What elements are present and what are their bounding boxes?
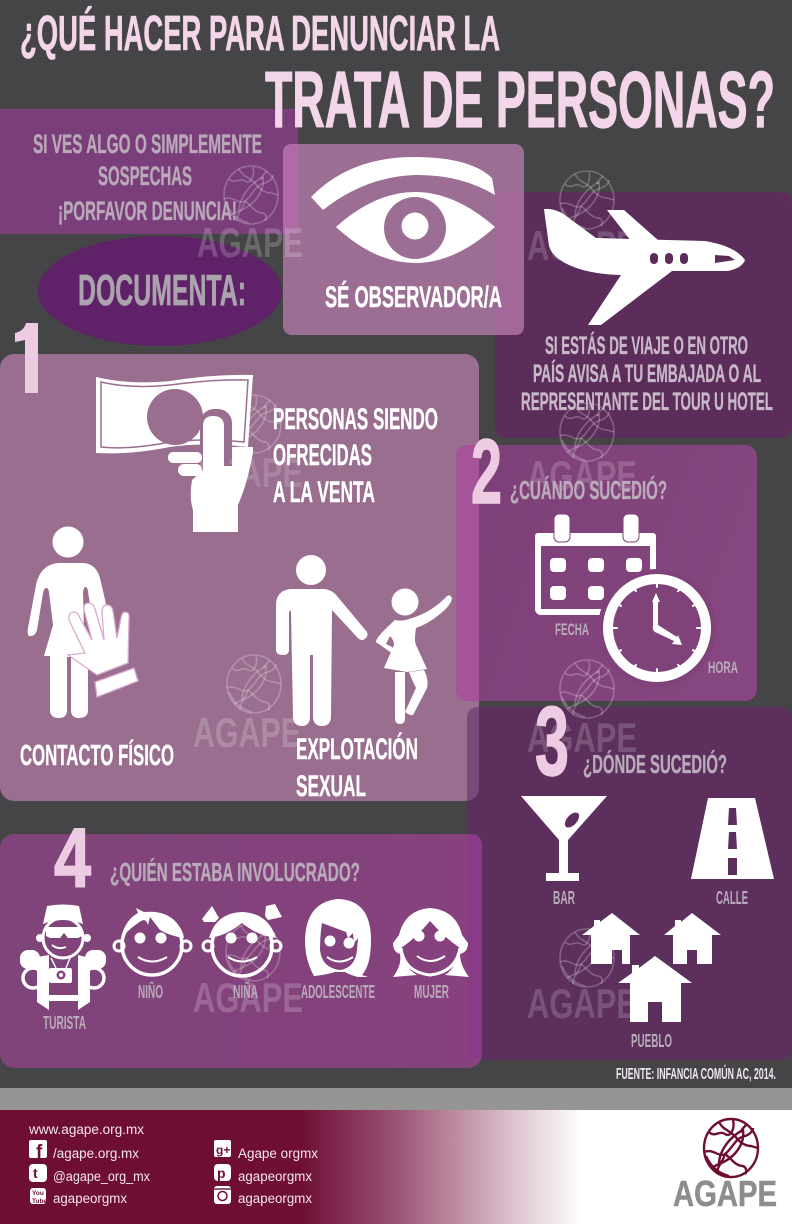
footer: facebook: /agape.org.mx <box>53 1146 139 1161</box>
icon: hand with money <box>96 375 253 532</box>
icon: clock <box>598 569 716 687</box>
number 1 <box>15 323 38 393</box>
icon: plane <box>544 209 745 325</box>
text: personas siendo ofrecidas: PERSONAS SIENDO <box>273 403 438 436</box>
footer: facebook <box>29 1140 139 1163</box>
icon: mujer <box>393 908 469 977</box>
watermark: agape 1 <box>197 166 303 266</box>
footer: instagram <box>214 1186 312 1206</box>
footer band <box>0 1110 792 1224</box>
footer: google plus: g+ <box>216 1143 230 1157</box>
logo: agape <box>673 1119 777 1214</box>
watermark: agape 3: AGAPE <box>527 452 637 499</box>
label: hora: HORA <box>708 658 738 677</box>
icon: woman with hand <box>28 526 138 718</box>
text: si ves algo: SOSPECHAS <box>98 161 192 191</box>
watermark: agape 2 <box>527 171 637 269</box>
watermark: agape 1: AGAPE <box>197 219 303 266</box>
label: mujer: MUJER <box>414 982 449 1002</box>
panel: paso 3 donde <box>467 707 792 1060</box>
footer: website: www.agape.org.mx <box>28 1122 144 1137</box>
label: se observador: SÉ OBSERVADOR/A <box>325 280 502 314</box>
panel: documenta oval <box>38 236 282 346</box>
footer: youtube: You <box>32 1190 44 1197</box>
footer: youtube: Tube <box>32 1198 47 1205</box>
grey band <box>0 1088 792 1110</box>
icon: calendar <box>535 514 656 612</box>
watermark: agape 7 <box>527 929 637 1027</box>
text: si ves algo: ¡PORFAVOR DENUNCIA! <box>58 196 237 226</box>
panel: se observador <box>283 144 524 335</box>
text: personas siendo ofrecidas <box>273 403 438 509</box>
panel: paso 2 cuando <box>456 445 757 701</box>
label: turista: TURISTA <box>43 1013 86 1033</box>
text: viaje <box>521 331 773 416</box>
panel: si ves algo <box>0 109 298 234</box>
icon: eye <box>311 157 495 263</box>
overlap: observador sobre viaje <box>495 192 524 335</box>
footer: twitter <box>29 1164 150 1184</box>
watermark: agape 3 <box>527 403 637 499</box>
icon: martini <box>521 796 607 881</box>
watermark: agape 8 <box>193 923 303 1021</box>
watermark: agape 7: AGAPE <box>527 980 637 1027</box>
overlap: paso 3 sobre paso 1 <box>467 707 479 801</box>
label: contacto fisico: CONTACTO FÍSICO <box>20 738 174 772</box>
icon: houses <box>582 913 721 1022</box>
number 4: 4 <box>54 811 91 905</box>
icon: adolescente <box>305 899 371 977</box>
footer: instagram: agapeorgmx <box>238 1191 312 1206</box>
watermark: agape 4: AGAPE <box>193 449 303 496</box>
label: calle: CALLE <box>716 888 748 908</box>
number 3: 3 <box>535 686 569 796</box>
footer: google plus <box>214 1140 318 1161</box>
label: explotacion sexual: EXPLOTACIÓN <box>296 732 418 766</box>
watermark: agape 8: AGAPE <box>193 974 303 1021</box>
icon: road <box>691 798 774 879</box>
heading: cuando sucedio: ¿CUÁNDO SUCEDIÓ? <box>510 475 667 505</box>
label: nino: NIÑO <box>138 981 163 1002</box>
footer: pinterest: agapeorgmx <box>238 1169 312 1184</box>
footer: pinterest: p <box>217 1165 226 1181</box>
overlap: paso 4 sobre paso 3 <box>467 834 482 1060</box>
footer: pinterest <box>214 1164 312 1184</box>
label: explotacion sexual <box>296 732 418 803</box>
icon: nino <box>114 908 191 975</box>
text: personas siendo ofrecidas: A LA VENTA <box>273 476 375 509</box>
watermark: agape 2: AGAPE <box>527 222 637 269</box>
footer: youtube: agapeorgmx <box>53 1191 127 1206</box>
panel: paso 1 documenta evidencia <box>0 354 479 801</box>
overlap: paso 2 sobre paso 1 <box>456 445 479 701</box>
panel: paso 4 quien <box>0 834 482 1068</box>
watermark: agape 5 <box>193 655 301 756</box>
footer: twitter: @agape_org_mx <box>53 1169 150 1184</box>
overlap: observador sobre texto <box>283 144 298 234</box>
icon: man and girl <box>276 555 452 726</box>
panel: viaje <box>495 192 792 438</box>
icon: nina <box>202 904 282 976</box>
label: nina: NIÑA <box>233 981 258 1002</box>
title <box>20 7 775 144</box>
label: adolescente: ADOLESCENTE <box>301 982 375 1002</box>
text: si ves algo <box>33 129 262 226</box>
label: fecha: FECHA <box>555 620 589 639</box>
label: bar: BAR <box>553 888 575 908</box>
icon: turista <box>20 904 106 1010</box>
footer: twitter: t <box>33 1165 38 1181</box>
number 2: 2 <box>471 421 502 523</box>
watermark: agape 6 <box>527 660 637 761</box>
watermark: agape 5: AGAPE <box>193 709 301 756</box>
text: personas siendo ofrecidas: OFRECIDAS <box>273 439 372 472</box>
label: explotacion sexual: SEXUAL <box>296 770 366 803</box>
watermark: agape 6: AGAPE <box>527 714 637 761</box>
watermark: agape 4 <box>193 395 303 496</box>
heading: quien estaba involucrado: ¿QUIÉN ESTABA INVOLUCRADO? <box>110 857 360 887</box>
label: pueblo: PUEBLO <box>631 1031 672 1051</box>
footer: google plus: Agape orgmx <box>238 1146 318 1161</box>
footer: youtube <box>30 1188 127 1206</box>
heading: documenta: DOCUMENTA: <box>78 266 246 315</box>
text: si ves algo: SI VES ALGO O SIMPLEMENTE <box>33 129 262 159</box>
footer: facebook: f <box>36 1142 43 1163</box>
